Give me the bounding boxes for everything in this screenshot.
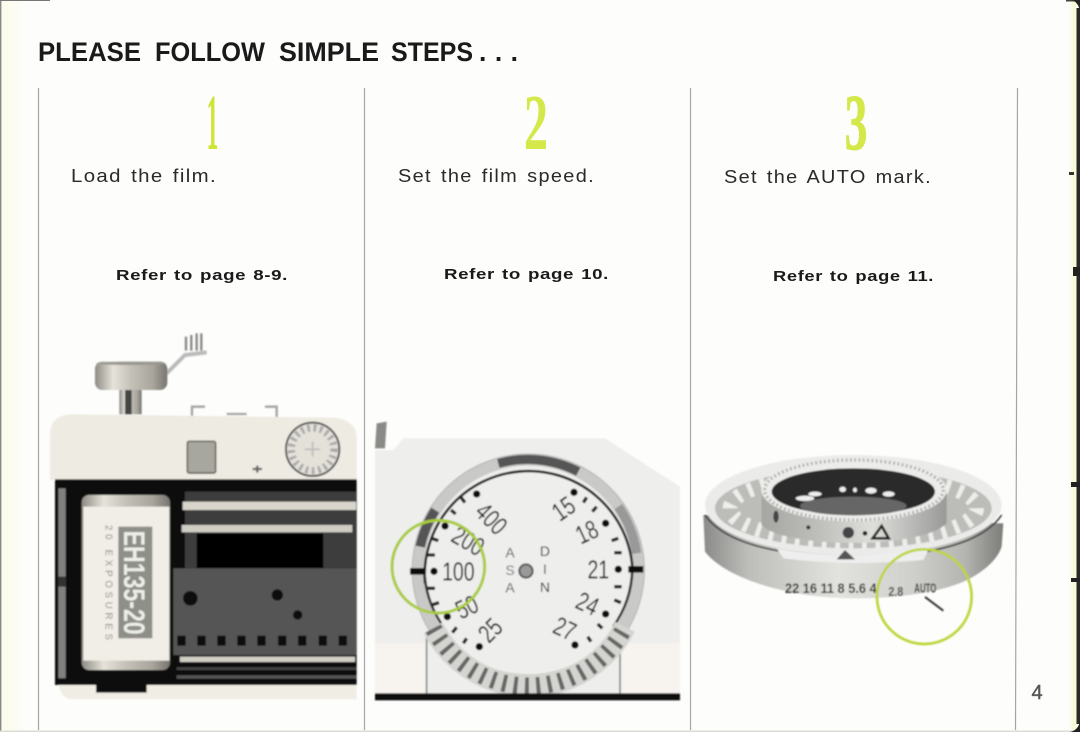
DIN scale numbers: 27	[549, 611, 581, 646]
dial face	[425, 467, 632, 673]
step 1 page reference: Refer to page 8-9.	[116, 267, 288, 284]
photo: lens ring	[703, 455, 1003, 644]
title: SIMPLE	[279, 37, 379, 67]
lens barrel	[703, 515, 1003, 598]
accessory shoe bracket	[192, 407, 277, 418]
ASA DIN lettering: A	[505, 544, 515, 560]
ASA scale numbers: 100	[442, 557, 475, 586]
film cartridge	[82, 495, 170, 670]
step number 3: 3	[845, 78, 867, 166]
step 2 page reference: Refer to page 10.	[444, 266, 609, 283]
title: . . .	[479, 37, 518, 67]
lens opening	[772, 468, 935, 515]
title: STEPS	[391, 37, 473, 67]
panel: step 1	[50, 78, 357, 699]
DIN scale numbers: 21	[587, 555, 609, 584]
index marks	[410, 569, 643, 571]
support lines	[427, 633, 620, 693]
frame counter dial	[286, 423, 339, 476]
ASA scale numbers	[442, 497, 513, 648]
tick marks	[427, 497, 622, 643]
ASA scale numbers: 25	[472, 612, 508, 648]
page number: 4	[1031, 682, 1043, 704]
ASA scale numbers: 400	[470, 497, 513, 540]
ASA DIN lettering: N	[540, 579, 550, 595]
camera top plate	[50, 414, 357, 480]
knurled wheel	[433, 627, 625, 686]
dial ring	[418, 460, 638, 680]
film chamber	[173, 492, 357, 679]
photo: lens ring: AUTO	[914, 582, 936, 596]
baseline bar	[375, 693, 680, 700]
column rules	[38, 88, 1018, 730]
step number 2: 2	[524, 79, 548, 167]
outer disc	[705, 455, 1002, 555]
film cartridge: EH135-20	[117, 531, 150, 635]
aperture scale text: 22 16 11 8 5.6 4	[785, 580, 877, 596]
title: FOLLOW	[155, 37, 265, 67]
photo: film speed dial	[375, 422, 680, 700]
step 2 instruction: Set the film speed.	[398, 166, 595, 186]
photo: lens ring: 2.8	[888, 585, 903, 599]
film cartridge: 20 EXPOSURES	[102, 525, 113, 640]
DIN scale numbers	[546, 490, 609, 646]
camera bottom edge	[58, 683, 357, 699]
ASA DIN lettering: I	[543, 561, 547, 577]
step 3 instruction: Set the AUTO mark.	[724, 167, 932, 187]
step number 1: 1	[207, 78, 218, 167]
panel: step 2	[375, 79, 680, 700]
ASA scale numbers: 50	[451, 589, 483, 625]
camera plate	[375, 438, 680, 697]
AUTO pointer	[925, 597, 943, 611]
highlight circle	[392, 520, 485, 613]
center screw	[519, 564, 533, 578]
collar symbols	[773, 511, 889, 538]
ASA DIN lettering: A	[505, 580, 515, 596]
DIN scale numbers: 15	[546, 490, 581, 527]
DIN scale numbers: 24	[571, 586, 604, 622]
film advance knob	[95, 333, 207, 414]
highlight circle	[877, 549, 972, 644]
mark	[253, 466, 262, 473]
bottom latch	[96, 682, 147, 693]
ASA scale dots	[430, 489, 622, 650]
panel: step 3	[703, 78, 1003, 644]
ASA DIN lettering	[505, 543, 550, 596]
camera interior	[55, 479, 357, 685]
photo: camera back with film cartridge	[50, 333, 357, 699]
step 3 page reference: Refer to page 11.	[773, 268, 934, 285]
ASA DIN lettering: D	[540, 543, 550, 559]
ASA DIN lettering: S	[505, 562, 515, 578]
DIN scale numbers: 18	[571, 514, 603, 550]
title: PLEASE	[38, 37, 141, 67]
title	[38, 37, 518, 67]
inner collar	[762, 490, 947, 543]
viewfinder window	[187, 441, 216, 473]
step 1 instruction: Load the film.	[71, 166, 217, 186]
ASA scale numbers: 200	[447, 520, 490, 562]
